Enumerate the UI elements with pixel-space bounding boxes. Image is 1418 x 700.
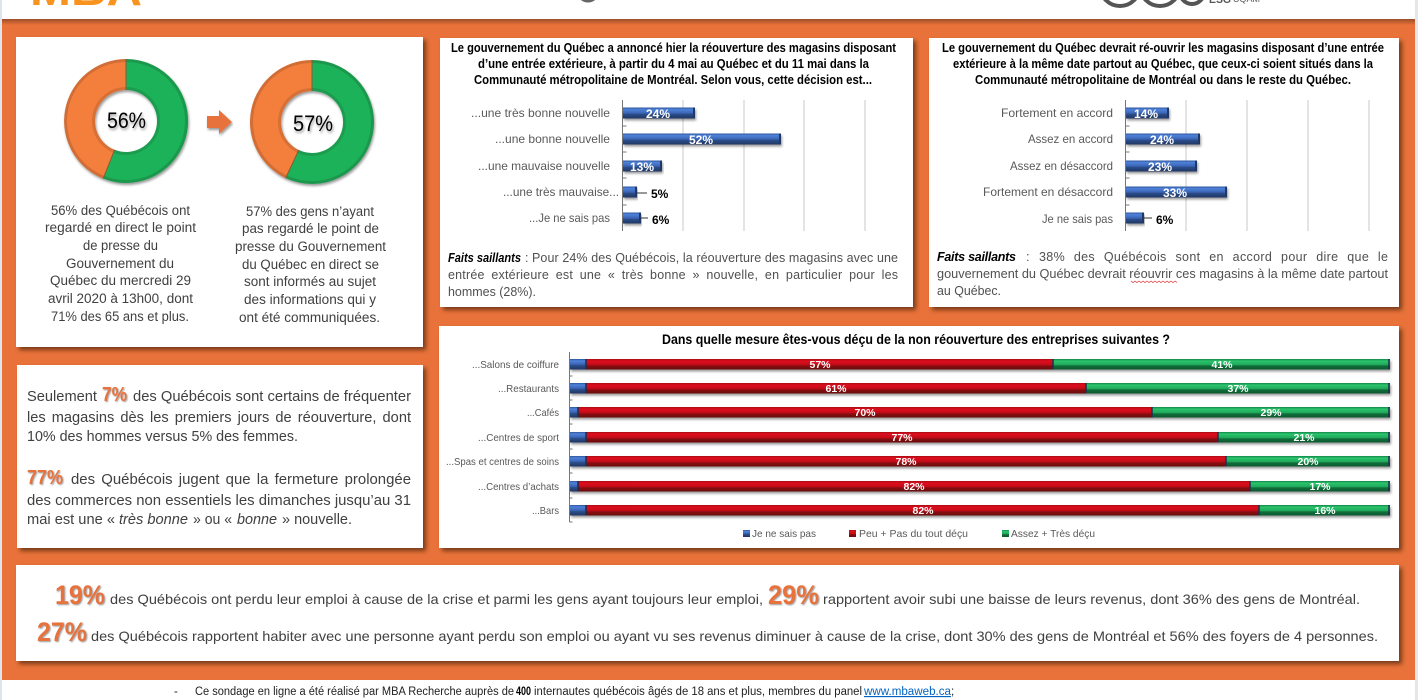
footer note: 400 bbox=[516, 686, 531, 698]
text block: 7%: Seulement bbox=[27, 389, 97, 405]
row: cafés: ...Cafés bbox=[527, 407, 559, 419]
row: bonne nouvelle: ...une bonne nouvelle bbox=[495, 132, 610, 146]
text block: faits saillants: hommes (28%). bbox=[448, 285, 536, 299]
text block: faits saillants: 38% des Québécois sont en accord pour dire que le bbox=[1039, 250, 1388, 264]
row: cafés: 70% bbox=[854, 407, 876, 419]
donut chart: 56%: 56% bbox=[107, 108, 146, 133]
row: fortement en accord bbox=[1001, 106, 1169, 121]
text block: 77%: » nouvelle. bbox=[282, 512, 352, 528]
row: salons de coiffure: ...Salons de coiffure bbox=[472, 359, 559, 371]
heading bbox=[451, 41, 897, 87]
row: spas: ...Spas et centres de soins bbox=[446, 456, 559, 468]
row: bars: ...Bars bbox=[532, 505, 559, 517]
text block: 57%: des informations qui y bbox=[244, 292, 376, 307]
text block: faits saillants: au Québec. bbox=[937, 284, 1001, 298]
row: je ne sais pas bbox=[1042, 212, 1174, 227]
row: centres d'achats bbox=[478, 481, 1390, 493]
row: je ne sais pas bbox=[529, 211, 670, 227]
row: je ne sais pas: Je ne sais pas bbox=[1042, 212, 1113, 226]
row: bars: 82% bbox=[912, 505, 934, 517]
row: centres d'achats: ...Centres d’achats bbox=[478, 481, 559, 493]
row: je ne sais pas: 6% bbox=[652, 213, 670, 227]
text block: 56%: avril 2020 à 13h00, dont bbox=[48, 291, 193, 306]
row: spas: 78% bbox=[895, 456, 917, 468]
row: centres de sport: ...Centres de sport bbox=[478, 432, 559, 444]
text block: 19% et 29%: des Québécois ont perdu leur emploi à cause de la crise et parmi les gens ayant toujours leur emploi, bbox=[110, 591, 763, 607]
text block: 57% bbox=[235, 204, 386, 325]
row: je ne sais pas: ...Je ne sais pas bbox=[529, 211, 610, 225]
text block: faits saillants: entrée extérieure est une « très bonne » nouvelle, en particulier pour les bbox=[448, 268, 898, 282]
text block: 7%: 7% bbox=[102, 384, 127, 406]
text block: 56%: 56% des Québécois ont bbox=[51, 203, 190, 218]
text block: faits saillants: Faits saillants bbox=[448, 251, 521, 265]
text block: 7% bbox=[27, 384, 411, 445]
text block: faits saillants bbox=[937, 250, 1389, 298]
row: bonne nouvelle: 52% bbox=[689, 133, 713, 147]
text block: 27% bbox=[37, 617, 1378, 647]
row: salons de coiffure: 57% bbox=[809, 359, 831, 371]
text block: 77%: » ou « bbox=[193, 512, 232, 528]
legend: Peu + Pas du tout déçu bbox=[859, 528, 968, 540]
panel: même date partout bbox=[929, 38, 1399, 307]
text block: 77%: 77% bbox=[27, 467, 63, 489]
footer note: Ce sondage en ligne a été réalisé par MBA Recherche auprès de bbox=[195, 686, 514, 698]
text block: 7%: des Québécois sont certains de fréquenter bbox=[133, 389, 411, 405]
row: fortement en accord: Fortement en accord bbox=[1001, 106, 1113, 120]
row: fortement en accord: 14% bbox=[1134, 107, 1158, 121]
text block: faits saillants: Pour 24% des Québécois, la réouverture des magasins avec une bbox=[532, 251, 898, 265]
heading: Dans quelle mesure êtes-vous déçu de la non réouverture des entreprises suivantes ? bbox=[662, 332, 1170, 347]
logo: ESG UQAM bbox=[1100, 0, 1260, 6]
text block: 19% et 29%: 19% bbox=[55, 580, 105, 610]
heading: Communauté métropolitaine de Montréal ou dans le reste du Québec. bbox=[975, 73, 1351, 87]
legend bbox=[743, 528, 1095, 540]
text block: 77%: des commerces non essentiels les dimanches jusqu’au 31 bbox=[27, 493, 411, 509]
row: restaurants: ...Restaurants bbox=[498, 383, 559, 395]
donut chart: 57%: 57% bbox=[293, 111, 333, 136]
text block: 57%: sont informés au sujet bbox=[244, 274, 376, 289]
legend: Assez + Très déçu bbox=[1011, 528, 1095, 540]
row: cafés: 29% bbox=[1260, 407, 1282, 419]
text block: 56%: 71% des 65 ans et plus. bbox=[51, 309, 189, 324]
row: fortement en désaccord bbox=[983, 185, 1227, 200]
bar chart bbox=[471, 100, 865, 231]
text block: 57%: 57% des gens n’ayant bbox=[246, 204, 374, 219]
bar chart bbox=[983, 100, 1369, 231]
text block: faits saillants: : bbox=[525, 251, 528, 265]
legend: Je ne sais pas bbox=[752, 528, 816, 540]
row: assez en désaccord bbox=[1010, 159, 1197, 174]
row: bars: 16% bbox=[1314, 505, 1336, 517]
row: très bonne nouvelle bbox=[471, 106, 695, 121]
row: très mauvaise bbox=[503, 185, 669, 201]
footer note bbox=[174, 686, 954, 698]
row: fortement en désaccord: Fortement en désaccord bbox=[983, 185, 1113, 199]
text block: 57%: du Québec en direct se bbox=[242, 257, 379, 272]
text block: 56%: de presse du bbox=[83, 238, 158, 253]
text block: 77% bbox=[27, 467, 411, 528]
row: assez en désaccord: 23% bbox=[1148, 160, 1172, 174]
text block: 77%: très bonne bbox=[119, 512, 188, 528]
text block: 77%: bonne bbox=[237, 512, 277, 528]
row: très bonne nouvelle: ...une très bonne nouvelle bbox=[471, 106, 610, 120]
row: restaurants: 37% bbox=[1227, 383, 1249, 395]
stacked bar chart bbox=[446, 352, 1390, 522]
row: salons de coiffure bbox=[472, 359, 1390, 371]
text block: 19% et 29% bbox=[55, 580, 1360, 610]
row: assez en accord: Assez en accord bbox=[1028, 132, 1113, 146]
row: centres de sport bbox=[478, 432, 1390, 444]
text block: 7%: les magasins dès les premiers jours de réouverture, dont bbox=[27, 410, 411, 426]
row: salons de coiffure: 41% bbox=[1211, 359, 1233, 371]
text block: faits saillants: gouvernement du Québec devrait réouvrir ces magasins à la même date partout bbox=[937, 267, 1389, 281]
heading: Le gouvernement du Québec a annoncé hier la réouverture des magasins disposant bbox=[451, 41, 897, 55]
text block: 19% et 29%: rapportent avoir subi une baisse de leurs revenus, dont 36% des gens de Montréal. bbox=[823, 591, 1360, 607]
heading: extérieure à la même date partout au Québec, que ceux-ci soient situés dans la bbox=[953, 57, 1374, 71]
text block: 27%: des Québécois rapportent habiter avec une personne ayant perdu son emploi ou ayant vu ses revenus diminuer à cause de la crise, dont 30% des gens de Montréal et 56% des foyers de 4 personnes. bbox=[91, 628, 1378, 644]
row: très mauvaise: 5% bbox=[651, 187, 669, 201]
footer note: www.mbaweb.ca bbox=[863, 686, 952, 698]
row: mauvaise nouvelle: ...une mauvaise nouvelle bbox=[478, 159, 610, 173]
panel: bonne nouvelle bbox=[440, 38, 913, 307]
text block: 57%: ont été communiquées. bbox=[239, 310, 380, 325]
text block: 57%: presse du Gouvernement bbox=[235, 239, 386, 254]
row: assez en accord: 24% bbox=[1150, 133, 1174, 147]
row: centres de sport: 21% bbox=[1293, 432, 1315, 444]
row: assez en désaccord: Assez en désaccord bbox=[1010, 159, 1113, 173]
text block: 19% et 29%: 29% bbox=[768, 580, 819, 610]
panel: déception entreprises bbox=[439, 326, 1399, 548]
panel: emploi et revenus bbox=[16, 565, 1399, 661]
row: bars bbox=[532, 505, 1390, 517]
text block: 56%: Québec du mercredi 29 bbox=[50, 273, 191, 288]
text block: 7%: 10% des hommes versus 5% des femmes. bbox=[27, 429, 298, 445]
heading bbox=[942, 41, 1384, 87]
text block: 56%: regardé en direct le point bbox=[45, 220, 196, 235]
row: restaurants: 61% bbox=[825, 383, 847, 395]
text block: 77%: mai est une « bbox=[27, 512, 115, 528]
text block: faits saillants bbox=[448, 251, 898, 299]
text block: faits saillants: : bbox=[1026, 250, 1029, 264]
row: très bonne nouvelle: 24% bbox=[646, 107, 670, 121]
footer note: - bbox=[174, 686, 178, 698]
panel: certains de fréquenter bbox=[17, 365, 423, 548]
text block: 56% bbox=[45, 203, 196, 324]
row: je ne sais pas: 6% bbox=[1156, 213, 1174, 227]
row: fortement en désaccord: 33% bbox=[1163, 186, 1187, 200]
panel: donuts bbox=[16, 37, 423, 347]
text block: 57%: pas regardé le point de bbox=[242, 221, 379, 236]
text block: 27%: 27% bbox=[37, 617, 87, 647]
text block: faits saillants: Faits saillants bbox=[937, 250, 1016, 264]
footer note: internautes québécois âgés de 18 ans et plus, membres du panel bbox=[534, 686, 862, 698]
text block: 56%: Gouvernement du bbox=[66, 256, 174, 271]
footer note: ; bbox=[951, 686, 954, 698]
row: cafés bbox=[527, 407, 1390, 419]
row: assez en accord bbox=[1028, 132, 1200, 147]
row: spas: 20% bbox=[1297, 456, 1319, 468]
row: centres de sport: 77% bbox=[891, 432, 913, 444]
row: centres d'achats: 17% bbox=[1309, 481, 1331, 493]
row: restaurants bbox=[498, 383, 1390, 395]
heading: d’une entrée extérieure, à partir du 4 mai au Québec et du 11 mai dans la bbox=[478, 57, 870, 71]
row: bonne nouvelle bbox=[495, 132, 781, 147]
row: très mauvaise: ...une très mauvaise... bbox=[503, 185, 619, 199]
donut chart: 57% bbox=[250, 60, 374, 184]
text block: 77%: des Québécois jugent que la fermeture prolongée bbox=[71, 472, 411, 488]
row: spas bbox=[446, 456, 1390, 468]
donut chart: 56% bbox=[64, 59, 188, 183]
row: mauvaise nouvelle bbox=[478, 159, 662, 174]
arrow bbox=[207, 110, 232, 134]
logo: centre mark bbox=[578, 0, 598, 1]
row: centres d'achats: 82% bbox=[903, 481, 925, 493]
row: mauvaise nouvelle: 13% bbox=[630, 160, 654, 174]
heading: Communauté métropolitaine de Montréal. Selon vous, cette décision est... bbox=[474, 73, 872, 87]
